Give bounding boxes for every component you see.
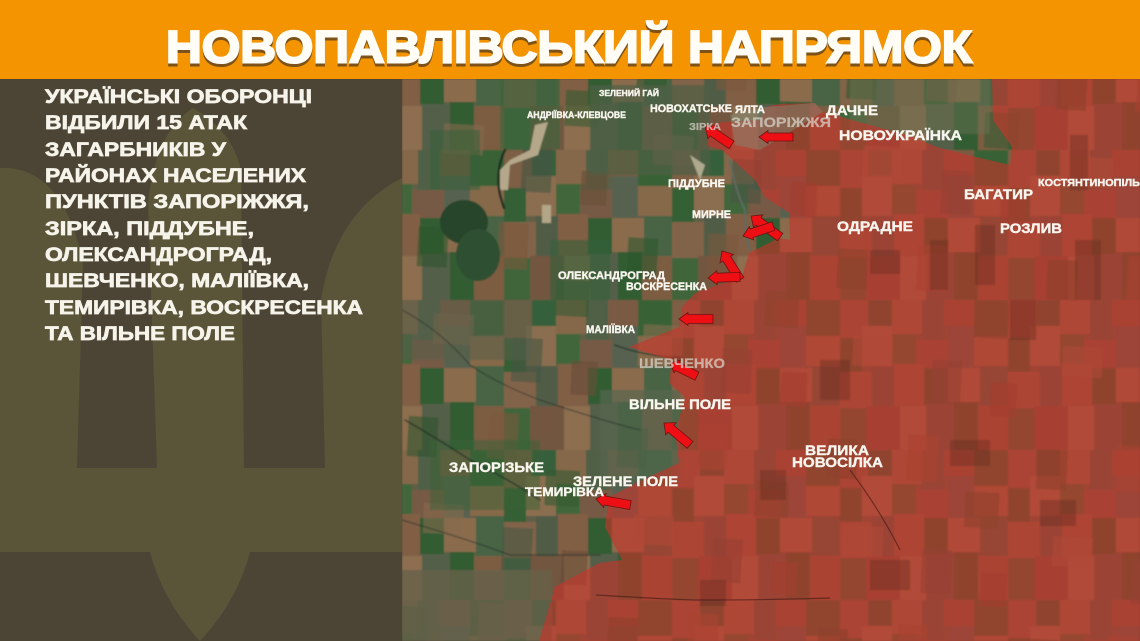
pale overlay near Zaporizhzhia bbox=[730, 103, 823, 150]
left panel background bbox=[0, 79, 402, 641]
rivers bbox=[402, 150, 750, 555]
arrow: Vilne Pole bbox=[664, 422, 694, 449]
header banner bbox=[0, 0, 1140, 79]
text block: summary: ПУНКТІВ ЗАПОРІЖЖЯ, bbox=[45, 192, 309, 213]
map labels: ВЕЛИКА bbox=[805, 442, 869, 458]
map labels: ЗЕЛЕНЕ ПОЛЕ bbox=[573, 473, 678, 489]
map labels: ВОСКРЕСЕНКА bbox=[626, 281, 707, 293]
arrow: Myrne north bbox=[750, 214, 784, 242]
map labels: НОВОУКРАЇНКА bbox=[839, 127, 962, 143]
arrow: Zirka bbox=[704, 125, 734, 149]
map labels: НОВОСІЛКА bbox=[792, 454, 883, 470]
map labels: ОДРАДНЕ bbox=[837, 218, 913, 234]
map labels: ПІДДУБНЕ bbox=[668, 178, 725, 190]
arrow: Temyrivka bbox=[596, 493, 632, 510]
map labels: ТЕМИРІВКА bbox=[525, 485, 604, 499]
text block: summary: РАЙОНАХ НАСЕЛЕНИХ bbox=[45, 165, 306, 187]
title: НОВОПАВЛІВСЬКИЙ НАПРЯМОК bbox=[166, 21, 972, 72]
map labels: КОСТЯНТИНОПІЛЬ bbox=[1038, 178, 1140, 189]
text block: summary: УКРАЇНСЬКІ ОБОРОНЦІ bbox=[45, 87, 312, 108]
icon: trident watermark bbox=[0, 108, 402, 641]
map labels: ШЕВЧЕНКО bbox=[639, 355, 725, 371]
arrow: Voskresenka west bbox=[708, 270, 740, 285]
arrow: Myrne west bbox=[742, 222, 776, 240]
occupied territory overlay bbox=[539, 79, 1140, 641]
map labels: РОЗЛИВ bbox=[1000, 220, 1062, 236]
map labels: ЗІРКА bbox=[689, 122, 721, 133]
map labels: БАГАТИР bbox=[964, 186, 1033, 202]
map labels: НОВОХАТСЬКЕ bbox=[650, 103, 732, 115]
map labels: МАЛІЇВКА bbox=[586, 323, 635, 336]
text block: summary: ЗІРКА, ПІДДУБНЕ, bbox=[45, 219, 254, 240]
text block: summary: ШЕВЧЕНКО, МАЛІЇВКА, bbox=[45, 271, 309, 292]
title: НОВОПАВЛІВСЬКИЙ НАПРЯМОК bbox=[166, 24, 972, 75]
text block: summary: ОЛЕКСАНДРОГРАД, bbox=[45, 245, 272, 266]
gully lines bbox=[596, 470, 900, 600]
arrow: Shevchenko bbox=[670, 360, 700, 381]
satellite map bbox=[402, 79, 1140, 641]
map labels: ЯЛТА bbox=[735, 104, 765, 116]
attack arrows bbox=[595, 120, 793, 512]
text block: summary: ЗАГАРБНИКІВ У bbox=[45, 140, 226, 161]
dark fields in occupied zone bbox=[700, 135, 1101, 606]
green and grey terrain patches bbox=[402, 79, 990, 641]
map labels: ВІЛЬНЕ ПОЛЕ bbox=[629, 396, 731, 412]
arrow: Maliivka bbox=[679, 312, 713, 326]
map labels: ЗЕЛЕНИЙ ГАЙ bbox=[599, 89, 659, 98]
map labels: ОЛЕКСАНДРОГРАД bbox=[558, 270, 665, 282]
text block: summary: ТА ВІЛЬНЕ ПОЛЕ bbox=[45, 324, 235, 345]
map labels: МИРНЕ bbox=[692, 209, 731, 221]
map labels: АНДРІЇВКА-КЛЕВЦОВЕ bbox=[527, 110, 626, 120]
text block: summary: ТЕМИРІВКА, ВОСКРЕСЕНКА bbox=[45, 298, 363, 319]
arrow: Voskresenka north bbox=[720, 250, 744, 283]
map labels bbox=[449, 89, 1140, 499]
arrow: Zaporizhzhia bbox=[759, 130, 793, 144]
text block: summary: ВІДБИЛИ 15 АТАК bbox=[45, 113, 247, 134]
map labels: ЗАПОРІЗЬКЕ bbox=[449, 459, 544, 475]
map labels: ЗАПОРІЖЖЯ bbox=[731, 114, 831, 130]
map labels: ДАЧНЕ bbox=[826, 102, 878, 118]
text block: summary bbox=[45, 87, 363, 345]
